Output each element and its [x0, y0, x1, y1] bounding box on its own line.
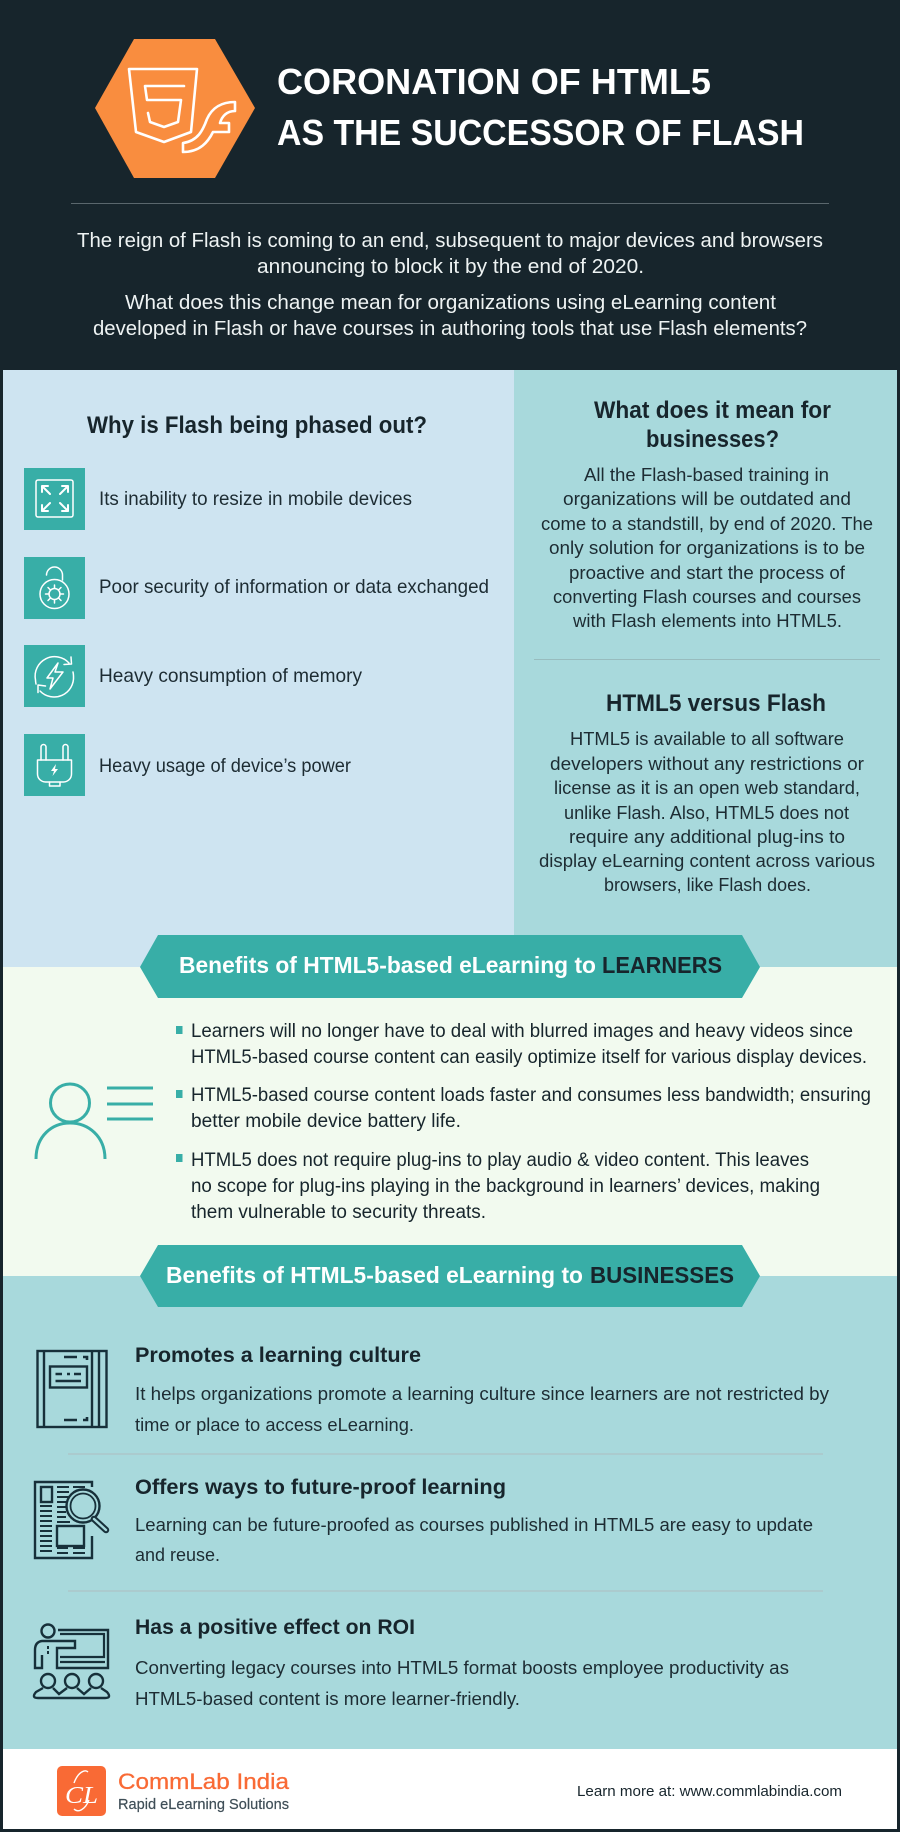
item: heavy memory consumption: Heavy consumption of memory: [99, 665, 362, 687]
benefit: positive effect on ROI: [34, 1615, 789, 1709]
banner: benefits to businesses: BUSINESSES: [590, 1262, 734, 1288]
text: HTML5 versus Flash: HTML5 is available to all software: [570, 728, 844, 749]
text: what it means for businesses: come to a standstill, by end of 2020. The: [541, 513, 873, 534]
text: what it means for businesses: [541, 464, 873, 631]
bullet list: learner benefits: HTML5-based course content can easily optimize itself for various display devices.: [191, 1047, 867, 1068]
logo: CommLab India: CL: [65, 1783, 98, 1809]
logo: CommLab India: CommLab India: [118, 1769, 290, 1794]
benefit: future-proof learning: and reuse.: [135, 1545, 220, 1565]
icon: newspaper with magnifier: [35, 1482, 106, 1558]
item: inability to resize: [24, 468, 412, 530]
heading: positive effect on ROI: Has a positive effect on ROI: [135, 1615, 415, 1639]
heading: what it means for businesses: [594, 397, 831, 453]
panel: why is Flash being phased out: [3, 370, 514, 967]
panel: benefits to learners: [3, 967, 897, 1276]
heading: why Flash phased out: Why is Flash being phased out?: [87, 412, 427, 439]
text: learn more link: Learn more at: www.commlabindia.com: [577, 1783, 842, 1800]
bullet list: learner benefits: no scope for plug-ins playing in the background in learners’ devices, making: [191, 1176, 820, 1197]
bullet list: learner benefits: better mobile device battery life.: [191, 1111, 461, 1132]
text: what it means for businesses: with Flash elements into HTML5.: [572, 610, 842, 631]
banner: benefits to learners: Benefits of HTML5-based eLearning to: [179, 952, 596, 978]
icon: presenter with audience: [34, 1624, 109, 1698]
heading: HTML5 versus Flash: HTML5 versus Flash: [606, 690, 826, 717]
bullet list: learner benefits: them vulnerable to security threats.: [191, 1202, 486, 1223]
banner: benefits to learners: [140, 935, 760, 998]
item: inability to resize: Its inability to resize in mobile devices: [99, 488, 412, 510]
item: heavy power usage: [24, 734, 351, 796]
panel: footer: [3, 1749, 897, 1829]
text: HTML5 versus Flash: require any additional plug-ins to: [569, 826, 845, 847]
text: what it means for businesses: proactive and start the process of: [569, 562, 846, 583]
heading: promotes a learning culture: Promotes a learning culture: [135, 1343, 421, 1367]
bullet list: learner benefits: [176, 1021, 871, 1223]
benefit: future-proof learning: [35, 1475, 813, 1565]
benefit: future-proof learning: Learning can be future-proofed as courses published in HTML5 are easy to update: [135, 1515, 813, 1535]
banner: benefits to businesses: [140, 1245, 760, 1307]
icon: learner with text lines: [36, 1084, 153, 1159]
panel: header: [71, 39, 829, 340]
banner: benefits to businesses: Benefits of HTML5-based eLearning to: [166, 1262, 583, 1288]
heading: what it means for businesses: What does it mean for: [594, 397, 831, 424]
text: HTML5 versus Flash: license as it is an open web standard,: [554, 777, 860, 798]
title: CORONATION OF HTML5: [277, 61, 711, 102]
text: HTML5 versus Flash: developers without any restrictions or: [550, 753, 864, 774]
title: [277, 61, 804, 153]
item: heavy power usage: Heavy usage of device’s power: [99, 755, 351, 777]
benefit: promotes a learning culture: [38, 1343, 829, 1435]
text: HTML5 versus Flash: unlike Flash. Also, HTML5 does not: [564, 802, 849, 823]
intro text: developed in Flash or have courses in authoring tools that use Flash elements?: [93, 317, 807, 340]
panel: businesses and HTML5 versus Flash: [514, 370, 897, 967]
banner: benefits to learners: LEARNERS: [602, 952, 722, 978]
intro text: What does this change mean for organizations using eLearning content: [125, 291, 776, 314]
item: poor security: Poor security of information or data exchanged: [99, 576, 489, 598]
text: HTML5 versus Flash: [539, 728, 875, 895]
benefit: positive effect on ROI: Converting legacy courses into HTML5 format boosts employee productivity as: [135, 1658, 789, 1678]
bullet list: learner benefits: HTML5 does not require plug-ins to play audio & video content. This leaves: [191, 1150, 809, 1171]
intro text: announcing to block it by the end of 2020.: [257, 255, 644, 278]
heading: what it means for businesses: businesses?: [646, 426, 779, 453]
logo: CommLab India: [57, 1766, 290, 1816]
panel: benefits to businesses: [3, 1276, 897, 1749]
item: poor security: [24, 557, 489, 619]
intro text: The reign of Flash is coming to an end, subsequent to major devices and browsers: [77, 229, 823, 252]
heading: future-proof learning: Offers ways to future-proof learning: [135, 1475, 506, 1499]
text: what it means for businesses: only solution for organizations is to be: [549, 537, 865, 558]
icon: book: [38, 1351, 106, 1427]
benefit: promotes a learning culture: time or place to access eLearning.: [135, 1415, 414, 1435]
text: what it means for businesses: All the Flash-based training in: [584, 464, 829, 485]
bullet list: learner benefits: Learners will no longer have to deal with blurred images and heavy videos since: [191, 1021, 853, 1042]
text: what it means for businesses: organizations will be outdated and: [563, 488, 851, 509]
logo: CommLab India: Rapid eLearning Solutions: [118, 1797, 289, 1813]
title: AS THE SUCCESSOR OF FLASH: [277, 112, 804, 153]
text: HTML5 versus Flash: browsers, like Flash does.: [604, 874, 811, 895]
benefit: promotes a learning culture: It helps organizations promote a learning culture since learners are not restricted by: [135, 1384, 829, 1404]
intro text: [77, 229, 823, 340]
bullet list: learner benefits: HTML5-based course content loads faster and consumes less bandwidth; ensuring: [191, 1085, 871, 1106]
item: heavy memory consumption: [24, 645, 362, 707]
text: what it means for businesses: converting Flash courses and courses: [553, 586, 861, 607]
text: HTML5 versus Flash: display eLearning content across various: [539, 850, 875, 871]
benefit: positive effect on ROI: HTML5-based content is more learner-friendly.: [135, 1689, 520, 1709]
icon: orange hexagon with HTML5 and Flash logos: [95, 39, 255, 178]
